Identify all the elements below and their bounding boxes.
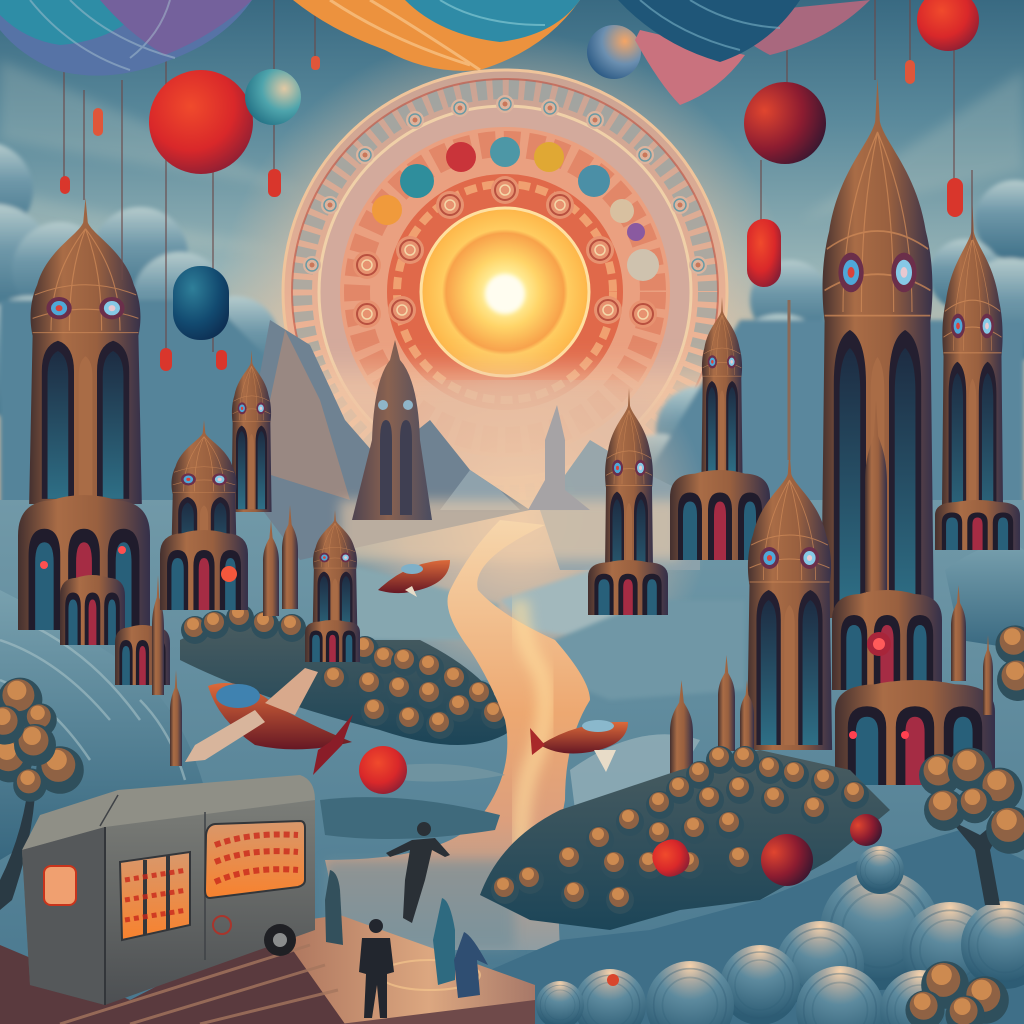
back clouds right	[624, 180, 1024, 670]
tree: right	[919, 748, 1024, 905]
drape: centre	[293, 0, 580, 71]
sphere: red low	[359, 746, 407, 794]
van wheel	[264, 924, 296, 956]
distant mountains	[240, 320, 700, 570]
river	[320, 520, 590, 950]
mid clouds left	[0, 590, 205, 860]
mid clouds right	[570, 543, 1024, 810]
tower base left	[18, 495, 150, 630]
drape: right	[618, 0, 870, 105]
inner red ring	[387, 174, 623, 410]
airship: right	[530, 720, 628, 772]
figure: leaping man	[386, 822, 450, 923]
tower: small dome	[305, 510, 360, 662]
top drapes	[0, 0, 870, 105]
capsule: navy	[173, 266, 229, 340]
tree: right edge	[995, 625, 1024, 701]
figure: standing man	[359, 919, 394, 1018]
drape: left	[0, 0, 252, 76]
van window: large	[205, 821, 305, 898]
airship: centre small	[378, 560, 450, 597]
van window: front	[44, 866, 76, 905]
sphere: big red	[149, 70, 253, 174]
foreground clouds	[490, 830, 1024, 1024]
figure: robed blue	[454, 932, 488, 998]
tower: centre right	[588, 388, 668, 615]
back clouds left	[0, 142, 330, 670]
sphere: plum right	[744, 82, 826, 164]
figure: robed left	[325, 870, 343, 945]
far towers	[231, 297, 770, 560]
lower glow fade	[290, 370, 730, 500]
tower: far right	[935, 205, 1020, 550]
capsule: orange low	[647, 834, 695, 882]
sun core	[421, 208, 589, 376]
people	[325, 822, 488, 1018]
tower: narrow left	[231, 350, 272, 512]
tower: tall right	[821, 78, 995, 785]
tower: far centre	[352, 340, 432, 520]
outer ornamental ring	[283, 70, 727, 514]
sphere: small plum	[850, 814, 882, 846]
valley base	[0, 380, 1024, 1024]
figure: robed teal	[433, 898, 455, 985]
sphere: blue top	[587, 25, 641, 79]
deck platform	[0, 915, 535, 1024]
small capsules	[93, 108, 103, 136]
tower base: narrow right	[670, 470, 770, 560]
capsule: red	[747, 219, 781, 287]
cables	[64, 0, 972, 352]
tower: far horizon spire	[528, 405, 590, 510]
foreground forest	[480, 746, 890, 930]
sphere: teal	[245, 69, 301, 125]
tower: left mid	[160, 420, 298, 616]
tower: far left large	[18, 198, 182, 766]
van body	[22, 800, 315, 1005]
sphere: orange top right	[917, 0, 979, 51]
sphere: plum low	[761, 834, 813, 886]
tower: narrow right	[701, 297, 743, 477]
tree: left	[0, 678, 84, 910]
airship: large left	[185, 668, 353, 775]
tree: bottom right	[905, 961, 1009, 1024]
van window: door	[120, 852, 190, 940]
tower: front right	[670, 300, 832, 800]
mandala sun	[283, 70, 730, 514]
sphere: tiny	[607, 974, 619, 986]
mid forest and valley	[180, 560, 745, 745]
van	[22, 775, 315, 1005]
middle ring with planets	[303, 95, 707, 457]
